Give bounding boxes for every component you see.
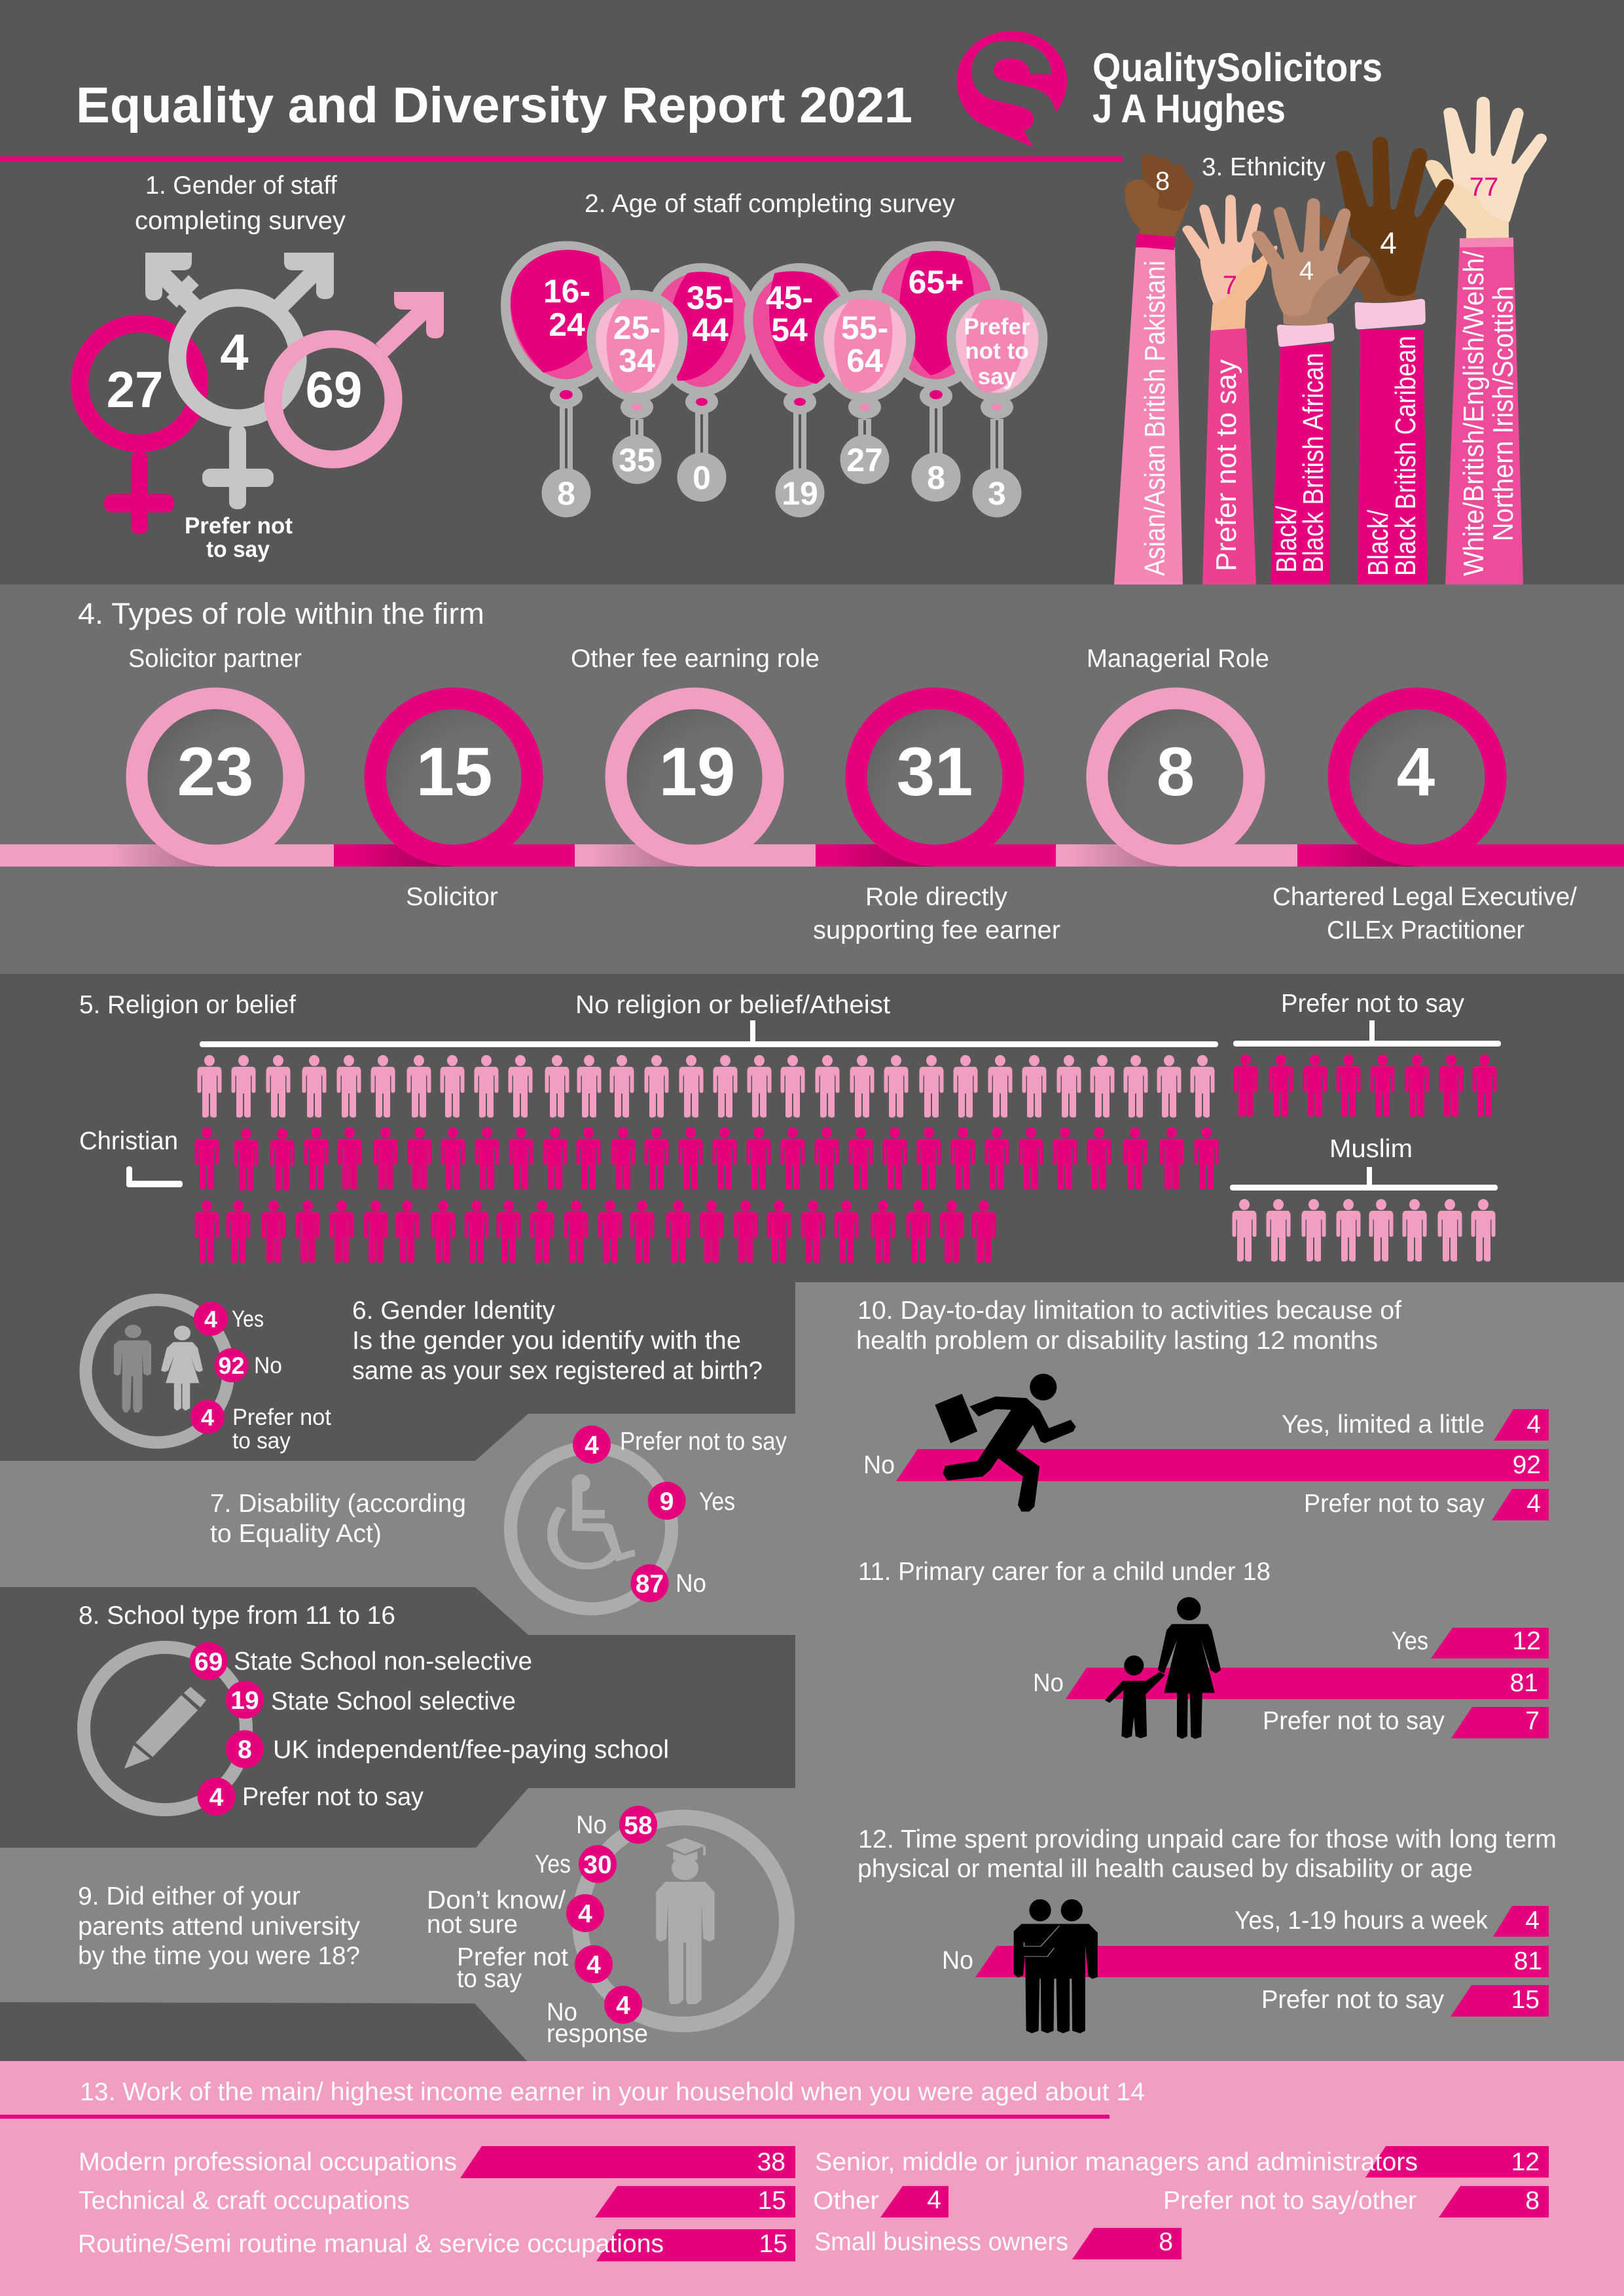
people row: prefer not to say bbox=[1233, 1054, 1496, 1117]
values: gender identity: Yes bbox=[232, 1306, 264, 1332]
heading: limitation: health problem or disability lasting 12 months bbox=[856, 1327, 1378, 1355]
balloon labels: not to bbox=[965, 338, 1029, 364]
role labels above: Other fee earning role bbox=[571, 645, 820, 673]
heading: limitation bbox=[856, 1297, 1401, 1355]
balloon strings and values: 0 bbox=[693, 459, 711, 496]
panel: 6 gender identity bbox=[86, 1297, 763, 1454]
label: prefer not to say: Prefer not to say bbox=[1281, 990, 1464, 1018]
heading: parents university: 9. Did either of your bbox=[78, 1882, 300, 1910]
labels: unpaid care: 4 bbox=[1525, 1907, 1540, 1935]
role labels below: Chartered Legal Executive/ bbox=[1272, 883, 1577, 911]
values: gender identity: 4 bbox=[204, 1306, 217, 1333]
balloon strings and values: 19 bbox=[782, 475, 818, 512]
people row: muslim bbox=[1232, 1199, 1495, 1262]
labels: occupations: 8 bbox=[1159, 2228, 1173, 2256]
ring: role supporting fee earner 31: 31 bbox=[897, 734, 973, 810]
balloon labels: 44 bbox=[692, 312, 729, 348]
ring: managerial 8 bbox=[1097, 698, 1254, 855]
gender values: 27 bbox=[107, 361, 163, 418]
gender values bbox=[107, 323, 362, 418]
title: Equality and Diversity Report 2021 bbox=[76, 77, 912, 134]
values: school type: Prefer not to say bbox=[242, 1783, 424, 1811]
labels: primary carer bbox=[1033, 1627, 1541, 1735]
heading: primary carer: 11. Primary carer for a child under 18 bbox=[858, 1558, 1271, 1586]
heading: gender identity: 6. Gender Identity bbox=[352, 1297, 555, 1325]
ring icon: wheelchair bbox=[511, 1448, 672, 1609]
arm: prefer not to say bbox=[1182, 194, 1278, 584]
label: muslim: Muslim bbox=[1329, 1135, 1413, 1163]
heading: parents university: by the time you were 18? bbox=[78, 1942, 360, 1970]
values: disability: 9 bbox=[660, 1488, 674, 1516]
labels: limitation: 92 bbox=[1513, 1451, 1541, 1479]
labels: primary carer: 12 bbox=[1513, 1627, 1541, 1655]
icon: male symbol 69 bbox=[273, 292, 444, 459]
labels: unpaid care: Yes, 1-19 hours a week bbox=[1235, 1907, 1488, 1935]
values: school type: UK independent/fee-paying school bbox=[273, 1736, 669, 1764]
balloon strings and values: 3 bbox=[988, 475, 1006, 512]
label: prefer not to say: to say bbox=[206, 537, 270, 562]
bars: unpaid care bbox=[975, 1906, 1549, 2017]
heading: gender bbox=[135, 171, 346, 235]
heading: unpaid care bbox=[857, 1825, 1557, 1883]
heading: household income earner: 13. Work of the main/ highest income earner in your household when you were aged about 14 bbox=[80, 2078, 1145, 2106]
heading: parents university: parents attend university bbox=[78, 1912, 361, 1941]
labels: unpaid care: No bbox=[942, 1946, 973, 1975]
labels: occupations: 15 bbox=[758, 2187, 786, 2215]
labels: limitation: No bbox=[863, 1451, 895, 1479]
balloon strings and values: 8 bbox=[557, 475, 575, 512]
background: parents university band bbox=[0, 1788, 795, 2061]
ring: solicitor partner 23: 23 bbox=[177, 734, 253, 810]
heading: gender: completing survey bbox=[135, 207, 346, 235]
ring icon: pencil bbox=[84, 1647, 246, 1810]
values: school type: State School selective bbox=[271, 1687, 516, 1715]
arm: black african: Black/ bbox=[1271, 505, 1303, 573]
bars: occupations bbox=[460, 2146, 1549, 2261]
role labels above: Solicitor partner bbox=[128, 645, 302, 673]
labels: occupations: 12 bbox=[1511, 2148, 1540, 2176]
heading rule bbox=[0, 2115, 1110, 2119]
gender values: 69 bbox=[306, 361, 362, 418]
panel: 3 ethnicity raised hands bbox=[1114, 97, 1547, 584]
heading: gender: 1. Gender of staff bbox=[145, 171, 337, 200]
heading: disability: 7. Disability (according bbox=[210, 1490, 466, 1518]
icon: mother and child bbox=[1105, 1597, 1221, 1739]
role labels above bbox=[128, 645, 1269, 673]
balloon 35-44 bbox=[650, 268, 753, 391]
values: gender identity: 92 bbox=[218, 1352, 245, 1379]
values: school type: 19 bbox=[230, 1687, 259, 1715]
panel: 8 school type bbox=[79, 1602, 669, 1816]
background: section 13 pink band bbox=[0, 2061, 1624, 2296]
values: gender identity: 4 bbox=[201, 1404, 214, 1431]
logo: speech bubble bbox=[957, 31, 1067, 147]
values: disability: Yes bbox=[699, 1488, 735, 1516]
values: parents university: 30 bbox=[583, 1851, 612, 1879]
arm: black african bbox=[1252, 198, 1370, 584]
panel: 9 parents university bbox=[78, 1806, 787, 2048]
values: disability: 87 bbox=[636, 1570, 664, 1598]
heading: disability bbox=[210, 1490, 466, 1548]
values: school type bbox=[190, 1642, 669, 1816]
values: school type: State School non-selective bbox=[234, 1647, 532, 1676]
panel: 1 gender of staff bbox=[80, 171, 444, 562]
balloon labels: 64 bbox=[846, 342, 883, 379]
logo wordmark: J A Hughes bbox=[1092, 86, 1286, 131]
labels: unpaid care bbox=[942, 1907, 1542, 2014]
arm: black caribbean: Black/ bbox=[1362, 509, 1394, 576]
label: no religion: No religion or belief/Atheist bbox=[575, 991, 890, 1019]
role labels below: CILEx Practitioner bbox=[1327, 916, 1525, 944]
values: disability bbox=[573, 1426, 787, 1602]
labels: limitation: 4 bbox=[1526, 1490, 1541, 1518]
people row: no religion bbox=[198, 1055, 1215, 1118]
balloon 25-34 bbox=[591, 295, 683, 397]
balloon strings and values: 35 bbox=[619, 442, 655, 478]
background: right panel sections 10 to 12 bbox=[795, 1282, 1624, 2061]
ring: solicitor 15 bbox=[375, 698, 532, 855]
balloon labels bbox=[543, 264, 1030, 389]
icon: running person bbox=[935, 1374, 1076, 1512]
heading: religion: 5. Religion or belief bbox=[79, 991, 296, 1019]
panel: 12 unpaid care bbox=[857, 1825, 1557, 2034]
arm: black african: 4 bbox=[1299, 257, 1314, 285]
panel: 2 age of staff balloons bbox=[505, 190, 1043, 517]
balloon strings and values: 27 bbox=[846, 442, 883, 478]
labels: limitation: Yes, limited a little bbox=[1282, 1410, 1485, 1439]
balloon strings and values bbox=[542, 384, 1021, 517]
ring icon: man and woman bbox=[86, 1300, 228, 1443]
arm: asian bbox=[1114, 154, 1194, 584]
panel: 10 day-to-day limitation bbox=[856, 1297, 1549, 1520]
values: parents university: No bbox=[547, 1998, 577, 2026]
label: christian: Christian bbox=[79, 1127, 178, 1155]
arm: prefer not to say: 7 bbox=[1223, 271, 1237, 300]
icon: transgender symbol 4 bbox=[145, 253, 334, 509]
balloon labels: say bbox=[978, 364, 1017, 389]
values: school type: 69 bbox=[194, 1648, 223, 1676]
labels: occupations: Other bbox=[813, 2187, 879, 2215]
ring: solicitor partner 23 bbox=[137, 698, 294, 855]
balloon labels: 54 bbox=[771, 312, 808, 348]
values: parents university: 4 bbox=[578, 1900, 592, 1928]
ring: other fee earning 19: 19 bbox=[659, 734, 735, 810]
labels: primary carer: No bbox=[1033, 1669, 1064, 1697]
balloon strings and values: 8 bbox=[927, 459, 945, 496]
values: parents university: 4 bbox=[616, 1992, 630, 2020]
arm: black african: Black British African bbox=[1297, 353, 1329, 573]
balloon 55-64 bbox=[819, 295, 911, 397]
arm: white: Northern Irish/Scottish bbox=[1487, 286, 1519, 541]
bars: primary carer bbox=[1066, 1628, 1549, 1738]
values: parents university: response bbox=[547, 2020, 648, 2048]
balloon 65+ bbox=[875, 246, 996, 384]
gender values: 4 bbox=[220, 323, 249, 381]
heading: gender identity bbox=[352, 1297, 763, 1385]
labels: primary carer: Prefer not to say bbox=[1263, 1707, 1445, 1735]
ring: role supporting fee earner 31 bbox=[856, 698, 1013, 855]
heading: ethnicity: 3. Ethnicity bbox=[1202, 153, 1326, 181]
labels: occupations: 8 bbox=[1525, 2187, 1540, 2215]
labels: occupations: Senior, middle or junior managers and administrators bbox=[815, 2148, 1418, 2176]
labels: limitation bbox=[863, 1410, 1541, 1518]
balloon labels: 25- bbox=[613, 310, 660, 346]
values: parents university bbox=[427, 1806, 657, 2048]
arm: black caribbean: Black British Caribean bbox=[1390, 336, 1422, 576]
panel: 4 types of role bbox=[0, 597, 1624, 944]
ring: other fee earning 19 bbox=[616, 698, 773, 855]
labels: unpaid care: 15 bbox=[1511, 1986, 1540, 2014]
values: disability: Prefer not to say bbox=[620, 1427, 787, 1456]
logo wordmark: QualitySolicitors bbox=[1092, 45, 1382, 90]
values: school type: 4 bbox=[209, 1784, 224, 1812]
heading: gender identity: Is the gender you identify with the bbox=[352, 1327, 741, 1355]
labels: occupations: Routine/Semi routine manual & service occupations bbox=[78, 2230, 664, 2258]
icon: female symbol 27 bbox=[80, 323, 199, 534]
labels: limitation: Prefer not to say bbox=[1304, 1490, 1485, 1518]
values: parents university: Prefer not bbox=[457, 1943, 568, 1971]
balloon labels: 24 bbox=[549, 306, 585, 343]
values: gender identity bbox=[190, 1302, 331, 1454]
labels: unpaid care: 81 bbox=[1514, 1947, 1542, 1975]
ring: solicitor 15: 15 bbox=[416, 734, 492, 810]
values: parents university: to say bbox=[457, 1965, 522, 1993]
balloon labels: 55- bbox=[841, 310, 888, 346]
role labels below: supporting fee earner bbox=[813, 916, 1060, 944]
ring icon: graduate bbox=[580, 1818, 787, 2024]
arm: white bbox=[1425, 97, 1547, 584]
values: school type: 8 bbox=[238, 1736, 252, 1764]
labels: primary carer: Yes bbox=[1392, 1627, 1428, 1655]
labels: occupations: 4 bbox=[927, 2186, 941, 2214]
ring: managerial 8: 8 bbox=[1157, 734, 1195, 810]
panel: 11 primary carer bbox=[858, 1558, 1549, 1739]
balloon prefer not to say bbox=[951, 295, 1043, 397]
values: parents university: 58 bbox=[624, 1812, 653, 1840]
role labels below: Solicitor bbox=[406, 883, 498, 911]
values: gender identity: Prefer not bbox=[232, 1405, 331, 1430]
values: parents university: No bbox=[576, 1811, 607, 1839]
heading: disability: to Equality Act) bbox=[210, 1520, 382, 1548]
arm: asian: Asian/Asian British Pakistani bbox=[1139, 260, 1171, 576]
labels: occupations: Prefer not to say/other bbox=[1163, 2187, 1416, 2215]
balloon labels: 35- bbox=[687, 279, 734, 316]
heading: limitation: 10. Day-to-day limitation to activities because of bbox=[857, 1297, 1401, 1325]
panel: 7 disability bbox=[210, 1426, 787, 1609]
logo wordmark bbox=[1092, 45, 1382, 131]
heading: gender identity: same as your sex registered at birth? bbox=[352, 1357, 763, 1385]
values: parents university: 4 bbox=[586, 1951, 601, 1979]
balloon labels: 34 bbox=[619, 342, 655, 379]
icon: two people embracing bbox=[1014, 1899, 1098, 2034]
header rule bbox=[0, 156, 1123, 162]
arm: white: 77 bbox=[1470, 173, 1498, 202]
labels: occupations: 15 bbox=[759, 2230, 787, 2258]
balloon 16-24 bbox=[505, 246, 626, 384]
role labels above: Managerial Role bbox=[1087, 645, 1269, 673]
balloon labels: 16- bbox=[543, 273, 590, 310]
arm: prefer not to say: Prefer not to say bbox=[1210, 359, 1242, 571]
arm: black caribbean bbox=[1320, 137, 1454, 584]
bars: limitation bbox=[896, 1409, 1549, 1520]
heading: unpaid care: physical or mental ill health caused by disability or age bbox=[857, 1855, 1473, 1883]
ribbon band bbox=[0, 844, 1624, 867]
values: disability: 4 bbox=[585, 1431, 599, 1460]
values: parents university: not sure bbox=[427, 1910, 518, 1939]
values: parents university: Don’t know/ bbox=[427, 1886, 566, 1914]
labels: limitation: 4 bbox=[1526, 1410, 1541, 1439]
background: section 4 band bbox=[0, 584, 1624, 974]
labels: primary carer: 7 bbox=[1525, 1707, 1540, 1735]
role labels below: Role directly bbox=[865, 883, 1008, 911]
label: prefer not to say bbox=[185, 513, 293, 562]
label: prefer not to say: Prefer not bbox=[185, 513, 293, 539]
ring: chartered legal executive 4 bbox=[1339, 698, 1496, 855]
labels: unpaid care: Prefer not to say bbox=[1261, 1986, 1444, 2014]
panel: 5 religion or belief bbox=[79, 990, 1501, 1263]
background: disability band bbox=[0, 1414, 795, 1635]
labels: occupations bbox=[78, 2148, 1540, 2258]
values: parents university: Yes bbox=[535, 1850, 571, 1878]
people rows: christian bbox=[195, 1127, 1219, 1263]
brackets bbox=[126, 1020, 1501, 1191]
heading: unpaid care: 12. Time spent providing unpaid care for those with long term bbox=[858, 1825, 1557, 1854]
balloon labels: Prefer bbox=[964, 314, 1030, 340]
heading: school type: 8. School type from 11 to 16 bbox=[79, 1602, 395, 1630]
labels: occupations: Modern professional occupations bbox=[79, 2148, 457, 2176]
role labels below bbox=[406, 883, 1577, 944]
labels: primary carer: 81 bbox=[1510, 1669, 1538, 1697]
arm: white: White/British/English/Welsh/ bbox=[1458, 250, 1490, 576]
balloon labels: 45- bbox=[766, 279, 813, 316]
values: disability: No bbox=[676, 1570, 706, 1598]
labels: occupations: Small business owners bbox=[814, 2228, 1068, 2256]
heading: parents university bbox=[78, 1882, 361, 1970]
ring: chartered legal executive 4: 4 bbox=[1397, 734, 1435, 810]
values: gender identity: No bbox=[254, 1353, 282, 1378]
heading: roles: 4. Types of role within the firm bbox=[78, 597, 484, 630]
arm: black caribbean: 4 bbox=[1380, 226, 1397, 260]
arm: asian: 8 bbox=[1155, 167, 1170, 196]
panel: 13 household income earner bbox=[0, 2078, 1549, 2261]
labels: occupations: 38 bbox=[757, 2148, 785, 2176]
balloon 45-54 bbox=[748, 268, 851, 391]
values: gender identity: to say bbox=[232, 1428, 291, 1454]
labels: occupations: Technical & craft occupations bbox=[79, 2187, 410, 2215]
heading: age: 2. Age of staff completing survey bbox=[585, 190, 955, 218]
balloon labels: 65+ bbox=[909, 264, 964, 300]
